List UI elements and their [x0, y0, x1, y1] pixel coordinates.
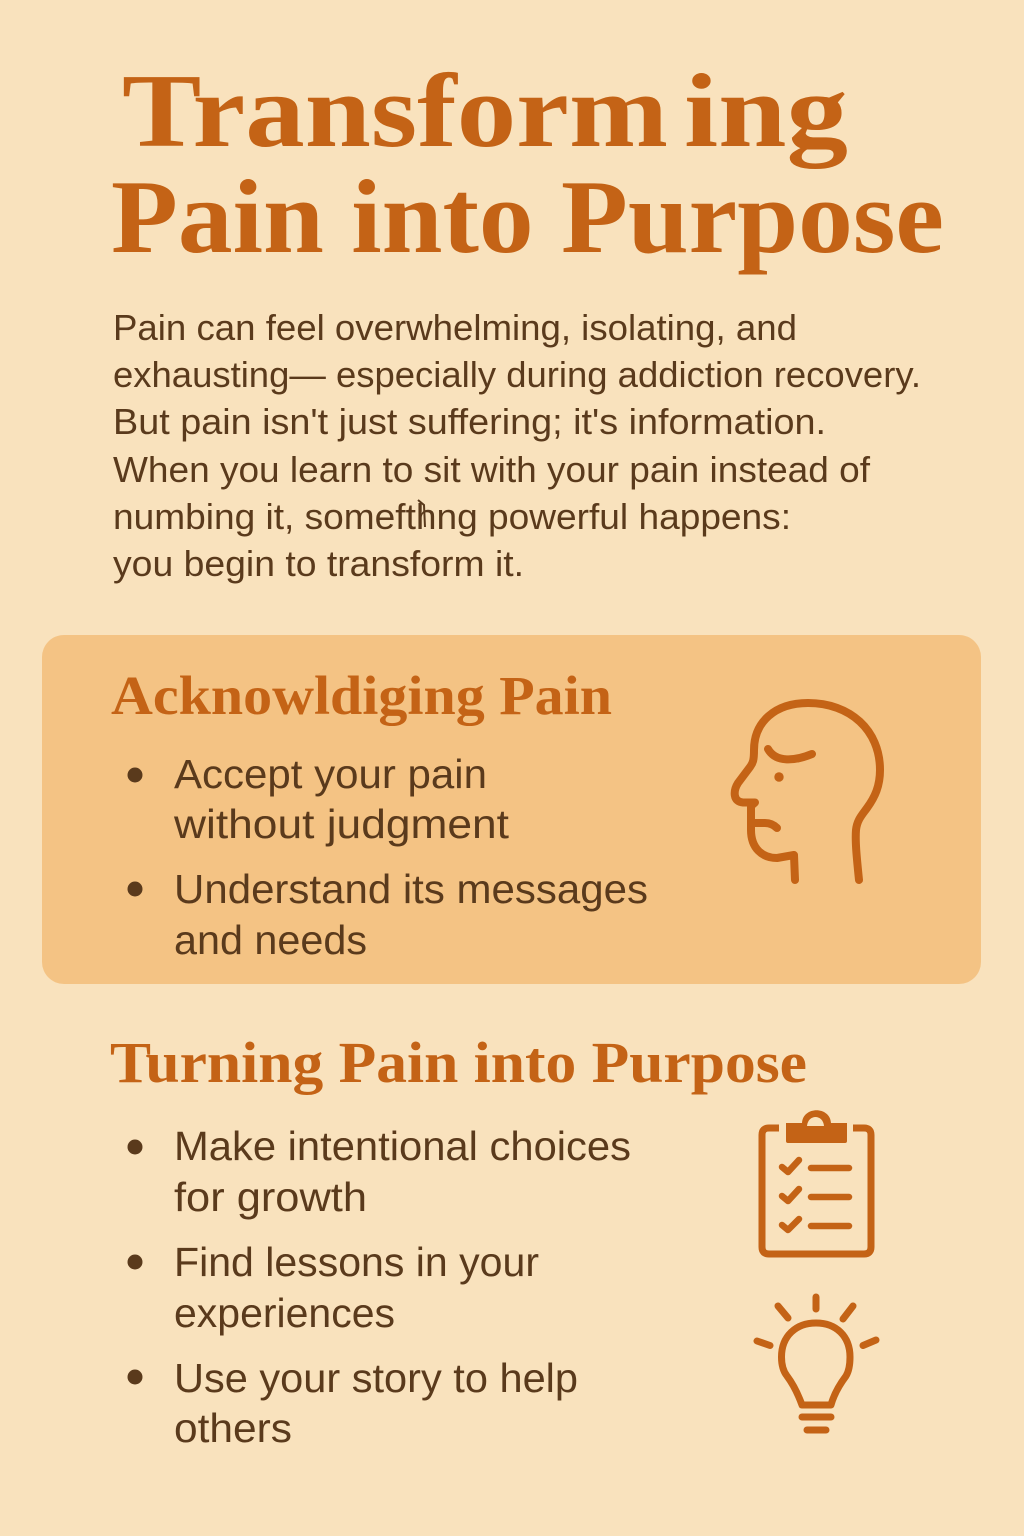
heading: acknowledging pain: Acknowldiging Pain	[111, 665, 612, 726]
bullet list: turning pain into purpose: Make intentional choices	[174, 1123, 631, 1169]
heading: turning pain into purpose: Turning Pain into Purpose	[110, 1030, 807, 1095]
intro paragraph: When you learn to sit with your pain instead of	[113, 449, 871, 490]
intro paragraph: Pain can feel overwhelming, isolating, and	[113, 307, 797, 348]
bullet list: turning pain into purpose: Use your story to help	[174, 1355, 578, 1401]
icon: light bulb	[757, 1297, 876, 1430]
bullet list: turning pain into purpose	[128, 1123, 631, 1451]
panel: acknowledging pain	[42, 635, 981, 984]
title	[111, 52, 944, 275]
bullet list: acknowledging pain: and needs	[174, 917, 367, 963]
bullet list: acknowledging pain: Understand its messages	[174, 866, 648, 912]
title: Transform	[122, 52, 668, 169]
bullet list: acknowledging pain: Accept your pain	[174, 751, 487, 797]
intro paragraph: But pain isn't just suffering; it's information.	[113, 401, 826, 442]
intro paragraph: you begin to transform it.	[113, 543, 524, 584]
icon: clipboard checklist	[762, 1110, 871, 1254]
title: ing	[684, 52, 848, 169]
title: Pain into Purpose	[111, 158, 944, 275]
bullet list: acknowledging pain: without judgment	[173, 801, 510, 847]
panel background	[42, 635, 981, 984]
intro paragraph	[113, 307, 921, 584]
bullet list: turning pain into purpose: others	[174, 1405, 292, 1451]
bullet list: acknowledging pain	[128, 751, 648, 963]
bullet list: turning pain into purpose: experiences	[174, 1290, 395, 1336]
bullet list: turning pain into purpose: Find lessons in your	[174, 1239, 539, 1285]
bullet list: turning pain into purpose: for growth	[174, 1174, 367, 1220]
intro paragraph: exhausting— especially during addiction recovery.	[113, 354, 921, 395]
intro paragraph: numbing it, somefthng powerful happens:	[113, 496, 791, 537]
icon: head in profile	[735, 703, 880, 880]
